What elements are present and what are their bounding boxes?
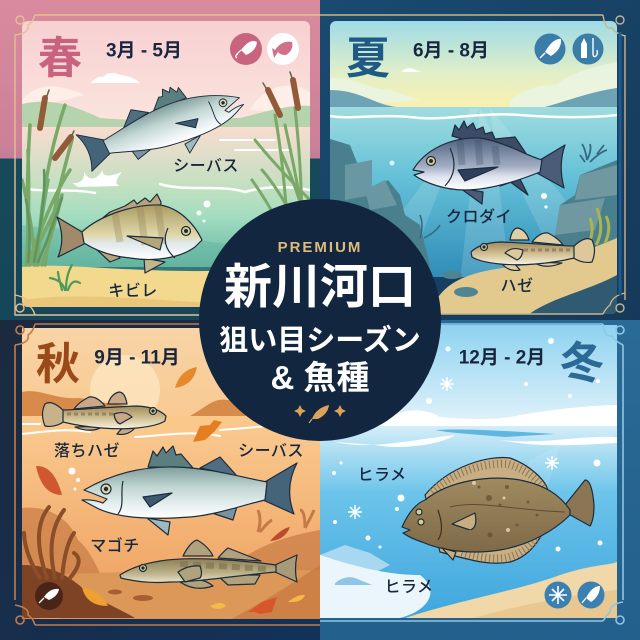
title line 3: & 魚種 — [270, 359, 370, 396]
panel: spring — [22, 21, 310, 310]
premium tag: PREMIUM — [278, 239, 362, 256]
months: autumn: 9月 - 11月 — [94, 348, 180, 368]
goby haze — [471, 228, 594, 270]
reeds left — [22, 90, 74, 265]
icon: lure — [578, 582, 604, 608]
panel: summer — [330, 21, 617, 315]
quadrant background: autumn — [0, 320, 320, 640]
falling leaves — [36, 367, 305, 614]
summer scene — [330, 21, 617, 315]
quadrant background: winter — [320, 320, 640, 640]
flounder hirame — [402, 457, 594, 563]
goby falling haze — [42, 392, 166, 434]
decorative frame: spring — [15, 15, 320, 315]
title line 2: 狙い目シーズン — [219, 323, 421, 357]
sea bass — [82, 446, 297, 535]
icon: lure — [230, 33, 262, 65]
label: sea bass: シーバス — [238, 443, 304, 460]
label: kibire: キビレ — [108, 282, 158, 300]
season kanji: winter: 冬 — [560, 327, 604, 391]
icon: lure — [35, 582, 63, 610]
label: sea bass: シーバス — [173, 158, 239, 175]
label: black sea bream: クロダイ — [446, 207, 512, 226]
kibire fish — [57, 194, 202, 273]
black sea bream — [413, 121, 565, 204]
winter scene — [320, 325, 617, 618]
label: falling goby: 落ちハゼ — [54, 442, 120, 460]
season kanji: spring: 春 — [38, 22, 82, 86]
months: summer: 6月 - 8月 — [413, 40, 489, 62]
season kanji: autumn: 秋 — [36, 328, 80, 392]
icon: fish — [267, 33, 299, 65]
months: winter: 12月 - 2月 — [459, 348, 545, 368]
autumn scene — [22, 328, 320, 620]
flathead magochi — [120, 540, 297, 588]
sea bass jumping — [72, 65, 253, 187]
months: spring: 3月 - 5月 — [106, 40, 182, 62]
center title badge — [199, 199, 441, 441]
icon: lure — [534, 34, 566, 64]
panel: winter — [320, 325, 617, 618]
label: goby: ハゼ — [500, 277, 534, 295]
label: flounder lower: ヒラメ — [384, 579, 434, 596]
icon: small gold fish lure — [294, 405, 346, 423]
spring scene — [22, 21, 310, 310]
reeds right — [250, 71, 310, 210]
title line 1: 新川河口 — [224, 261, 416, 314]
decorative frame: autumn — [15, 324, 320, 625]
icon: rig and hook — [572, 34, 604, 64]
panel: autumn — [22, 328, 320, 620]
quadrant background: summer — [320, 0, 640, 320]
season kanji: summer: 夏 — [346, 22, 390, 86]
decorative frame: summer — [320, 15, 625, 314]
decorative frame: winter — [320, 324, 624, 624]
quadrant background: spring — [0, 0, 320, 320]
label: flounder upper: ヒラメ — [357, 467, 407, 484]
shore grass — [50, 265, 80, 290]
label: flathead: マゴチ — [90, 536, 140, 555]
icon: snowflake — [544, 582, 572, 608]
